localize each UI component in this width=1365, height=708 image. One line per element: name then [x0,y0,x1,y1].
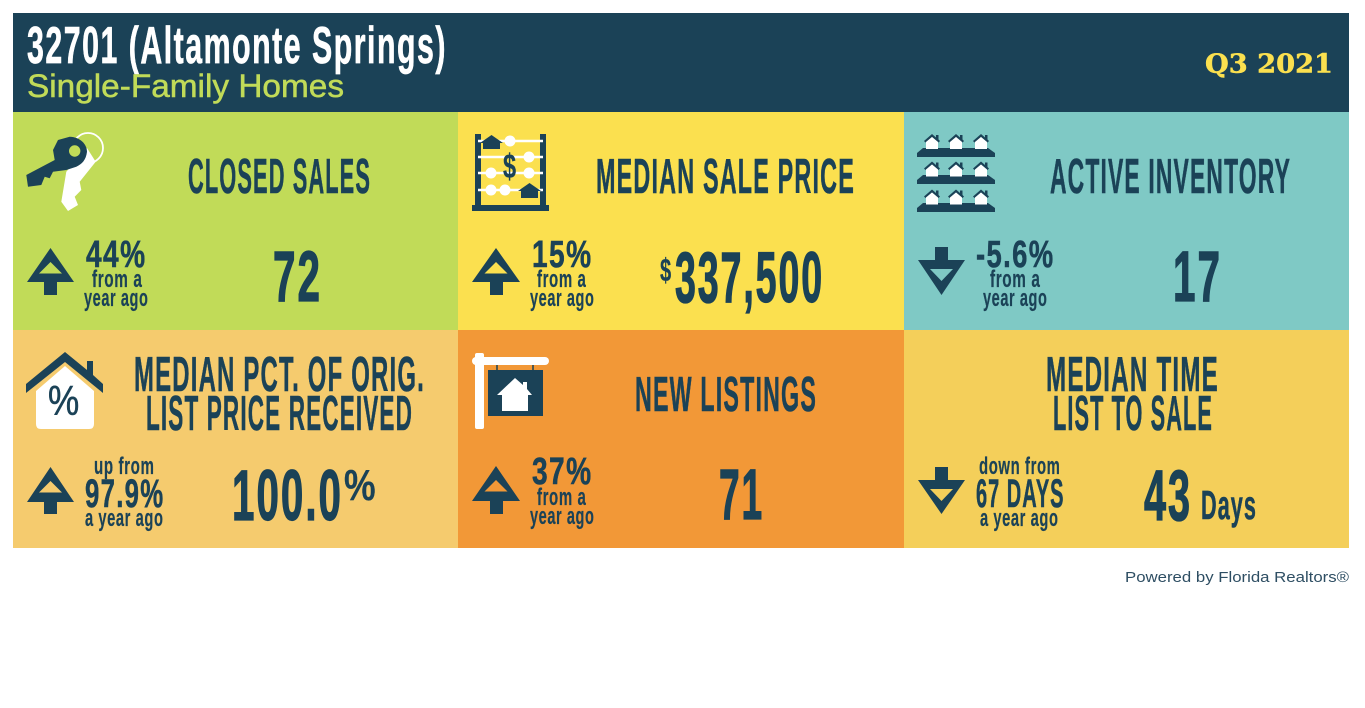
change from a year ago: year ago [84,285,148,312]
panel: median time list to sale: 67 DAYS [976,472,1064,516]
icon: up arrow [27,467,74,514]
change from a year ago: year ago [530,503,594,530]
value: 71 [719,456,764,535]
icon: rows of houses [917,134,995,212]
icon: up arrow [27,248,74,295]
change from a year ago: year ago [983,285,1048,312]
change from a year ago: year ago [530,285,594,312]
change from a year ago: a year ago [980,505,1058,532]
icon: house with percent [26,352,103,429]
change from a year ago: from a [990,266,1040,293]
value: 100.0 [232,457,343,536]
value: 337,500 [675,239,824,318]
panel: closed sales [13,112,458,330]
change from a year ago: down from [979,453,1060,480]
icon: up arrow [472,248,520,295]
change from a year ago [530,451,594,530]
change from a year ago [84,234,148,312]
change from a year ago: from a [537,484,586,511]
icon: keys [26,133,103,211]
change from a year ago: from a [92,266,142,293]
change from a year ago: 15% [532,234,592,276]
value: 72 [273,238,322,317]
panel: median time list to sale [904,330,1349,548]
panel: median pct of original list price: LIST PRICE RECEIVED [146,387,413,441]
change from a year ago: a year ago [85,505,164,532]
value: 17 [1173,238,1222,317]
panel: new listings [458,330,904,548]
icon: up arrow [472,466,520,514]
change from a year ago: 97.9% [85,472,164,516]
icon: abacus: $ [503,148,517,186]
heading [1046,348,1219,441]
panel: median pct of original list price: MEDIAN PCT. OF ORIG. [134,348,425,402]
icon: down arrow [918,467,965,514]
change from a year ago [85,453,164,532]
value: % [344,461,377,510]
panel: median sale price: MEDIAN SALE PRICE [596,150,855,204]
period label: Q3 2021 [1205,50,1333,80]
value [660,239,824,318]
subtitle: Single-Family Homes [27,68,344,104]
header band [13,13,1349,112]
change from a year ago: up from [94,453,154,480]
value: 43 [1144,457,1192,536]
panel: median sale price [458,112,904,330]
change from a year ago: 37% [532,451,592,493]
value: $ [660,252,672,288]
change from a year ago [976,453,1064,532]
icon: abacus [472,134,549,211]
icon: house with percent: % [48,377,81,424]
panel: active inventory [904,112,1349,330]
footer credit: Powered by Florida Realtors® [1125,569,1349,586]
title: 32701 (Altamonte Springs) [27,17,447,75]
heading [134,348,425,441]
panel: new listings: NEW LISTINGS [635,368,817,422]
change from a year ago: 44% [86,234,146,276]
change from a year ago: from a [537,266,586,293]
value: Days [1201,482,1257,528]
panel: median pct of original list price [13,330,458,548]
change from a year ago [976,234,1054,312]
icon: down arrow [918,247,965,295]
change from a year ago: -5.6% [976,234,1054,276]
panel: closed sales: CLOSED SALES [188,150,371,204]
icon: real estate sign [472,353,549,429]
change from a year ago [530,234,594,312]
